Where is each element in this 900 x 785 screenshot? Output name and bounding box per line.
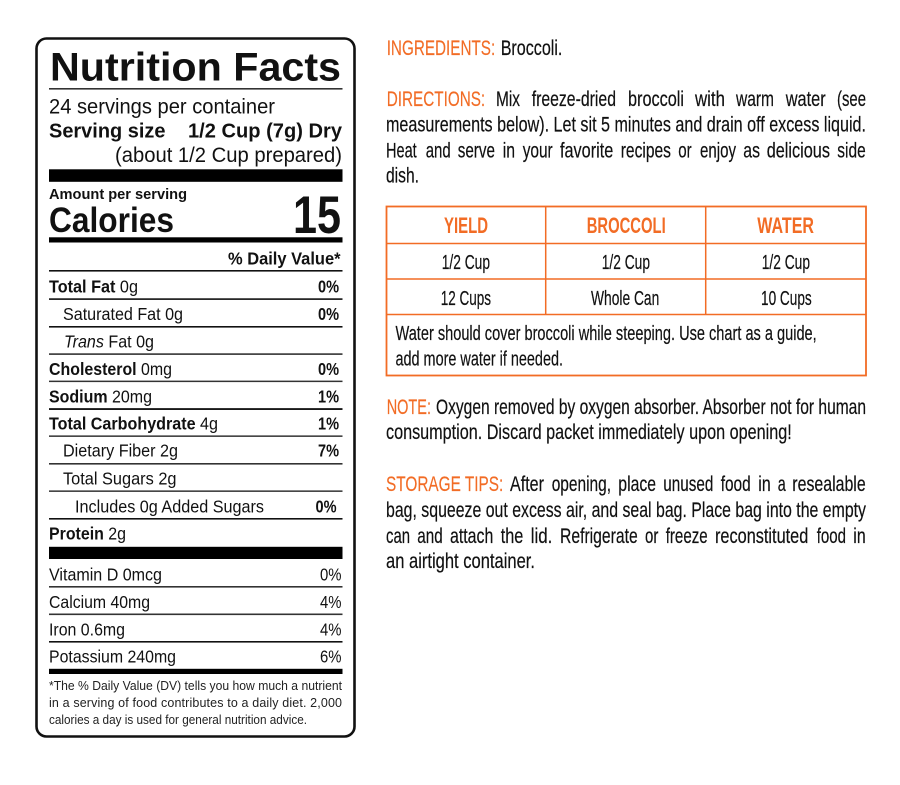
text: serving size: 1/2 Cup (7g) Dry	[188, 120, 343, 142]
table row: whole can: 10 Cups	[761, 287, 812, 310]
text block: storage tips: opening,	[552, 472, 611, 496]
text: prepared amount: (about 1/2 Cup prepared)	[115, 143, 342, 167]
row: trans fat: Trans Fat 0g	[64, 331, 154, 351]
panel: right column text and table	[386, 36, 866, 573]
row: saturated fat: 0%	[318, 304, 339, 324]
table row: whole can: 12 Cups	[441, 287, 491, 310]
text block: directions: (see	[837, 87, 866, 111]
calories row: Calories	[49, 201, 174, 240]
text block: storage tips: place	[618, 472, 656, 496]
row: added sugars: Includes 0g Added Sugars	[75, 497, 264, 517]
text block: directions: delicious	[767, 139, 830, 163]
row: total sugars: Total Sugars 2g	[63, 469, 176, 489]
text block: directions: and	[426, 139, 451, 163]
row: dietary fiber	[63, 441, 339, 461]
table row: half cup: 1/2 Cup	[762, 251, 810, 274]
text block: directions: Heat	[386, 139, 417, 163]
text block: storage tips: food	[721, 472, 751, 496]
text block: directions: warm	[735, 87, 774, 111]
row: potassium	[49, 647, 342, 667]
table row: half cup: 1/2 Cup	[602, 251, 650, 274]
calories row	[49, 186, 341, 245]
text: amount per serving: Amount per serving	[49, 186, 187, 203]
text block: storage tips: in	[758, 472, 771, 496]
text block: ingredients: INGREDIENTS:	[387, 36, 495, 60]
text block: storage tips: in	[853, 524, 866, 548]
row: added sugars: 0%	[316, 497, 336, 517]
row: total carbohydrate	[49, 413, 339, 433]
text block: directions: enjoy	[700, 139, 736, 163]
text block: storage tips: freeze	[666, 524, 708, 548]
table note: add more water if needed.	[396, 348, 563, 370]
row: sodium: 1%	[318, 387, 339, 407]
text: serving size	[49, 120, 343, 142]
row: vitamin D: Vitamin D 0mcg	[49, 565, 162, 585]
table row: whole can	[441, 287, 812, 310]
row: total fat	[49, 277, 339, 297]
text block: ingredients: Broccoli.	[501, 36, 562, 60]
row: total carbohydrate: 1%	[318, 413, 339, 433]
text: servings per container: 24 servings per container	[49, 94, 275, 118]
row: sodium: Sodium 20mg	[49, 387, 152, 407]
footnote: in a serving of food contributes to a daily diet. 2,000	[49, 696, 342, 710]
text block: directions: broccoli	[628, 87, 684, 111]
panel: nutrition facts label	[36, 38, 354, 736]
text block: directions: with	[694, 87, 725, 111]
text block: directions: or	[678, 139, 692, 163]
table row: whole can: Whole Can	[591, 287, 659, 310]
text block: note	[386, 395, 866, 444]
table: yield broccoli water	[386, 206, 866, 376]
text block: storage tips: a	[778, 472, 786, 496]
row: saturated fat: Saturated Fat 0g	[63, 304, 183, 324]
footnote: *The % Daily Value (DV) tells you how much a nutrient	[49, 679, 343, 693]
text block: storage tips: reconstituted	[715, 524, 808, 548]
footnote	[49, 679, 343, 727]
row: sodium	[49, 387, 339, 407]
text block: storage tips: lid.	[531, 524, 552, 548]
text block: directions: serve	[458, 139, 495, 163]
table row: half cup	[442, 251, 810, 274]
row: vitamin D: 0%	[320, 565, 342, 585]
row: iron: Iron 0.6mg	[49, 620, 125, 640]
table note	[396, 322, 817, 370]
text block: storage tips: can	[386, 524, 410, 548]
row: cholesterol: Cholesterol 0mg	[49, 359, 172, 379]
row: potassium: 6%	[320, 647, 342, 667]
text block: directions: in	[503, 139, 515, 163]
row: potassium: Potassium 240mg	[49, 647, 176, 667]
text block: directions: recipes	[621, 139, 671, 163]
text block: directions: water	[785, 87, 826, 111]
row: dietary fiber: Dietary Fiber 2g	[63, 441, 178, 461]
text block: storage tips: STORAGE TIPS:	[386, 472, 503, 496]
row: total fat: Total Fat 0g	[49, 277, 138, 297]
text block: storage tips: Refrigerate	[560, 524, 638, 548]
text block: storage tips	[386, 472, 866, 573]
row: iron	[49, 620, 342, 640]
table header: YIELD	[444, 213, 488, 238]
text block: storage tips: resealable	[792, 472, 866, 496]
text block: directions	[386, 87, 866, 188]
row: vitamin D	[49, 565, 342, 585]
table header: BROCCOLI	[587, 213, 666, 238]
footnote: calories a day is used for general nutrition advice.	[49, 713, 307, 727]
text block: directions: your	[523, 139, 553, 163]
text block: storage tips: or	[645, 524, 658, 548]
row: cholesterol	[49, 359, 339, 379]
row: calcium: 4%	[320, 592, 342, 612]
text block: directions: freeze-dried	[532, 87, 616, 111]
text block: storage tips: After	[510, 472, 544, 496]
text: percent daily value heading: % Daily Value*	[228, 248, 341, 268]
text block: storage tips: attach	[450, 524, 493, 548]
text block: directions: favorite	[560, 139, 613, 163]
row: dietary fiber: 7%	[318, 441, 339, 461]
row: cholesterol: 0%	[318, 359, 339, 379]
table row: half cup: 1/2 Cup	[442, 251, 490, 274]
nutrient rows	[49, 248, 342, 667]
text block: storage tips: the	[501, 524, 523, 548]
row: iron: 4%	[320, 620, 342, 640]
table header	[444, 213, 814, 238]
row: calcium	[49, 592, 342, 612]
text block: directions: dish.	[386, 164, 419, 188]
text block: note: NOTE:	[387, 395, 431, 419]
text block: directions: DIRECTIONS:	[387, 87, 485, 111]
text block: directions: side	[837, 139, 866, 163]
row: total carbohydrate: Total Carbohydrate 4g	[49, 413, 218, 433]
text block: storage tips: unused	[663, 472, 713, 496]
title: Nutrition Facts: Nutrition Facts	[50, 46, 341, 90]
table header: WATER	[757, 213, 814, 238]
text block: directions: Mix	[496, 87, 520, 111]
text block: storage tips: and	[417, 524, 443, 548]
row: calcium: Calcium 40mg	[49, 592, 150, 612]
text block: storage tips: food	[817, 524, 846, 548]
row: saturated fat	[63, 304, 339, 324]
text block: directions: as	[743, 139, 760, 163]
text block: storage tips: an airtight container.	[386, 549, 535, 573]
row: protein: Protein 2g	[49, 523, 126, 543]
text: serving size: Serving size	[49, 120, 166, 142]
row: total fat: 0%	[318, 277, 339, 297]
calories row: 15	[293, 186, 341, 245]
